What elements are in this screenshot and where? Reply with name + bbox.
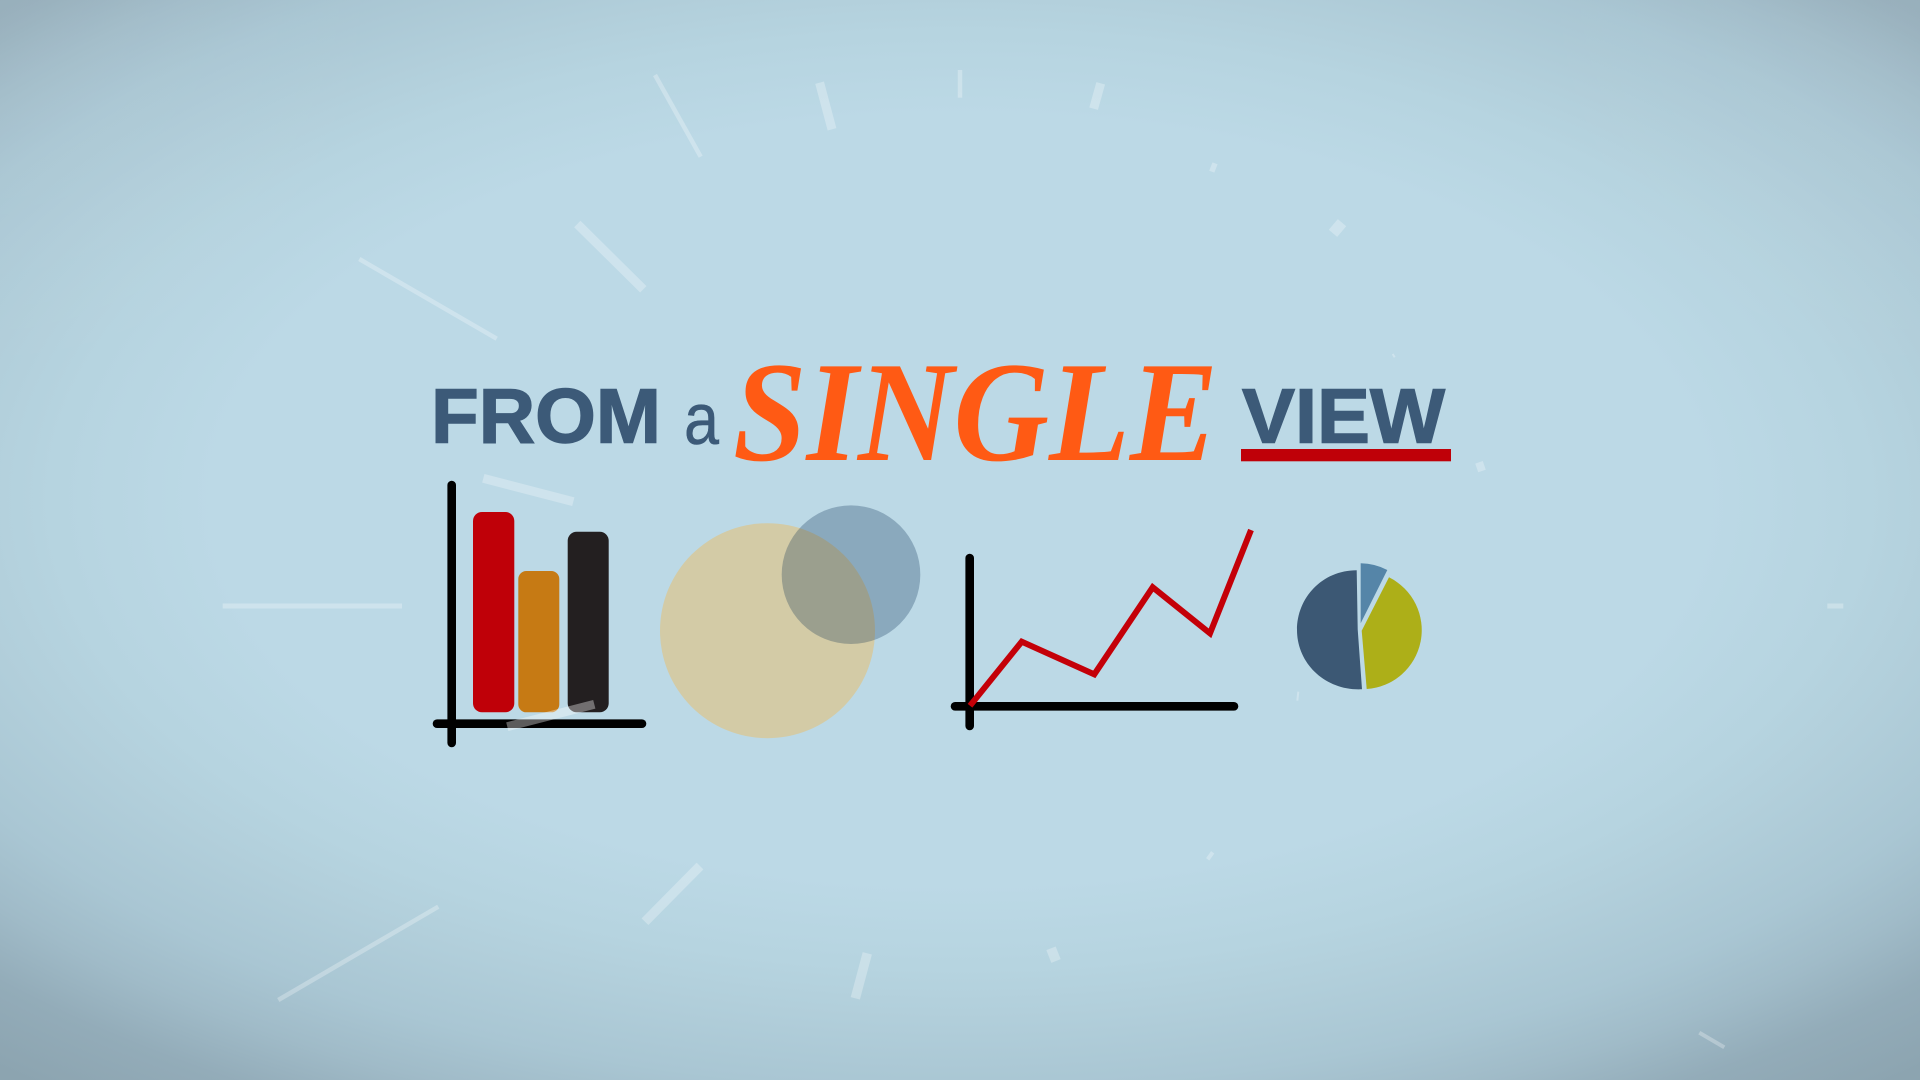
dark blue slice <box>1297 570 1362 689</box>
red bar <box>473 512 514 712</box>
vertical axis <box>965 558 974 726</box>
title <box>431 333 1451 491</box>
orange bar <box>518 571 559 712</box>
horizontal axis <box>437 719 642 728</box>
tan circle <box>660 523 875 738</box>
bar chart <box>437 485 642 743</box>
venn diagram <box>660 505 920 738</box>
blue circle <box>782 505 920 644</box>
line chart <box>955 530 1251 726</box>
translucent ray over bar chart <box>507 704 594 727</box>
word: SINGLE: SINGLE <box>733 333 1218 491</box>
vertical axis <box>447 485 456 743</box>
red trend line <box>970 530 1251 706</box>
red underline <box>1241 449 1451 461</box>
light blue slice <box>1361 563 1387 623</box>
black bar <box>568 532 609 712</box>
horizontal axis <box>955 702 1234 711</box>
yellow slice <box>1362 577 1422 689</box>
word: a: a <box>684 380 720 460</box>
word: VIEW: VIEW <box>1242 374 1445 460</box>
pie chart <box>1297 563 1422 689</box>
word: FROM: FROM <box>431 374 661 460</box>
